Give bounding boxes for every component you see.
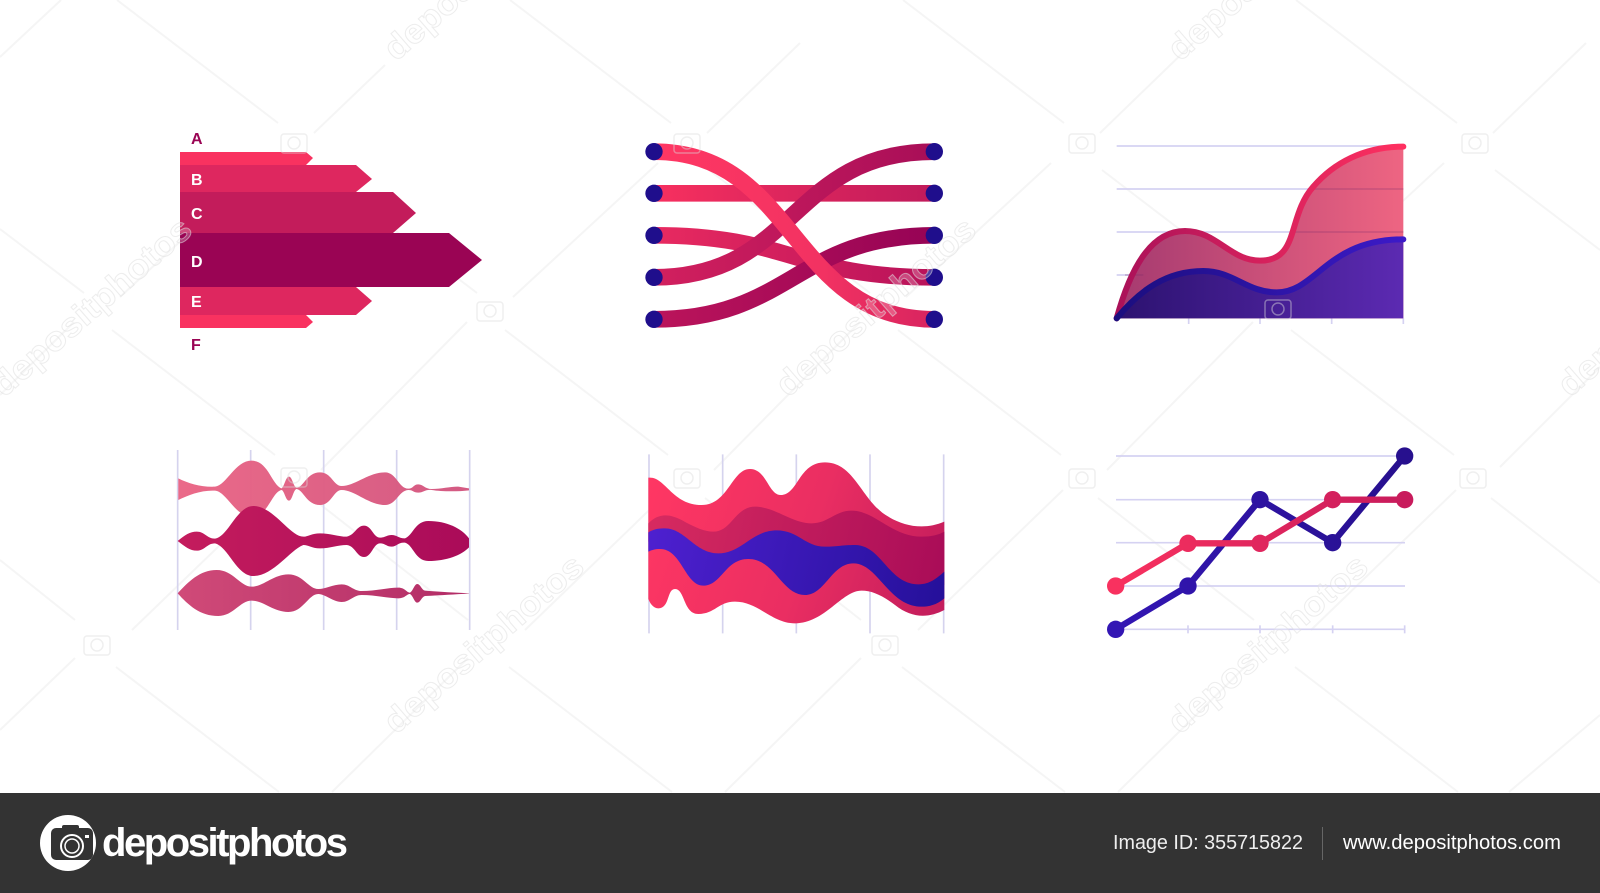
chart: line graph <box>1107 447 1413 638</box>
area grid lines <box>1117 146 1403 324</box>
icon: camera logo <box>40 815 96 871</box>
wave: red base <box>648 462 944 623</box>
label F: F <box>191 337 201 354</box>
ribbon: fifth to third <box>654 235 934 319</box>
arrow C <box>180 192 416 233</box>
wave: blue band <box>648 528 944 607</box>
label E: E <box>191 294 202 311</box>
arrow A <box>180 152 313 165</box>
logo wordmark: depositphotos <box>102 821 348 865</box>
label C: C <box>191 206 203 223</box>
ribbon: third to fourth <box>654 235 934 277</box>
watermark text: depositphotos <box>768 210 983 404</box>
area: purple series <box>1117 239 1403 318</box>
line: pink series <box>1117 147 1403 318</box>
chart: arrow bars <box>180 131 482 354</box>
area: pink series <box>1117 147 1403 318</box>
image id: Image ID: 355715822 <box>1113 832 1303 854</box>
wave grid lines <box>649 454 944 633</box>
ribbon end dots <box>645 143 943 328</box>
watermark text: depositphotos <box>1160 547 1375 741</box>
arrow E <box>180 287 372 315</box>
wave: dark band <box>648 507 944 595</box>
ribbon: first to fifth <box>654 152 934 319</box>
website url: www.depositphotos.com <box>1342 832 1561 854</box>
stream grid lines <box>178 450 470 630</box>
ribbon: straight <box>654 168 934 218</box>
grid overlay on pink area <box>1125 189 1403 275</box>
ribbon: fourth to first <box>654 152 934 277</box>
footer divider <box>1322 827 1324 860</box>
watermark camera icons <box>84 134 1488 655</box>
label A: A <box>191 131 203 148</box>
watermark text: depositphotos <box>376 547 591 741</box>
series: pink <box>1107 491 1413 595</box>
chart: violin streams <box>178 450 470 630</box>
line: purple series <box>1117 239 1403 318</box>
label B: B <box>191 172 203 189</box>
line chart grid <box>1116 456 1405 633</box>
chart: area <box>1117 146 1403 324</box>
chart: stacked waves <box>648 454 944 633</box>
arrow B <box>180 165 372 192</box>
stream: bottom <box>178 570 469 616</box>
stream: top <box>178 461 469 517</box>
series: blue <box>1107 447 1413 638</box>
chart: crossing ribbons <box>645 143 943 328</box>
arrow D <box>180 233 482 287</box>
label D: D <box>191 254 203 271</box>
footer bar <box>0 793 1600 893</box>
stream: middle <box>178 506 469 576</box>
arrow F <box>180 315 313 328</box>
